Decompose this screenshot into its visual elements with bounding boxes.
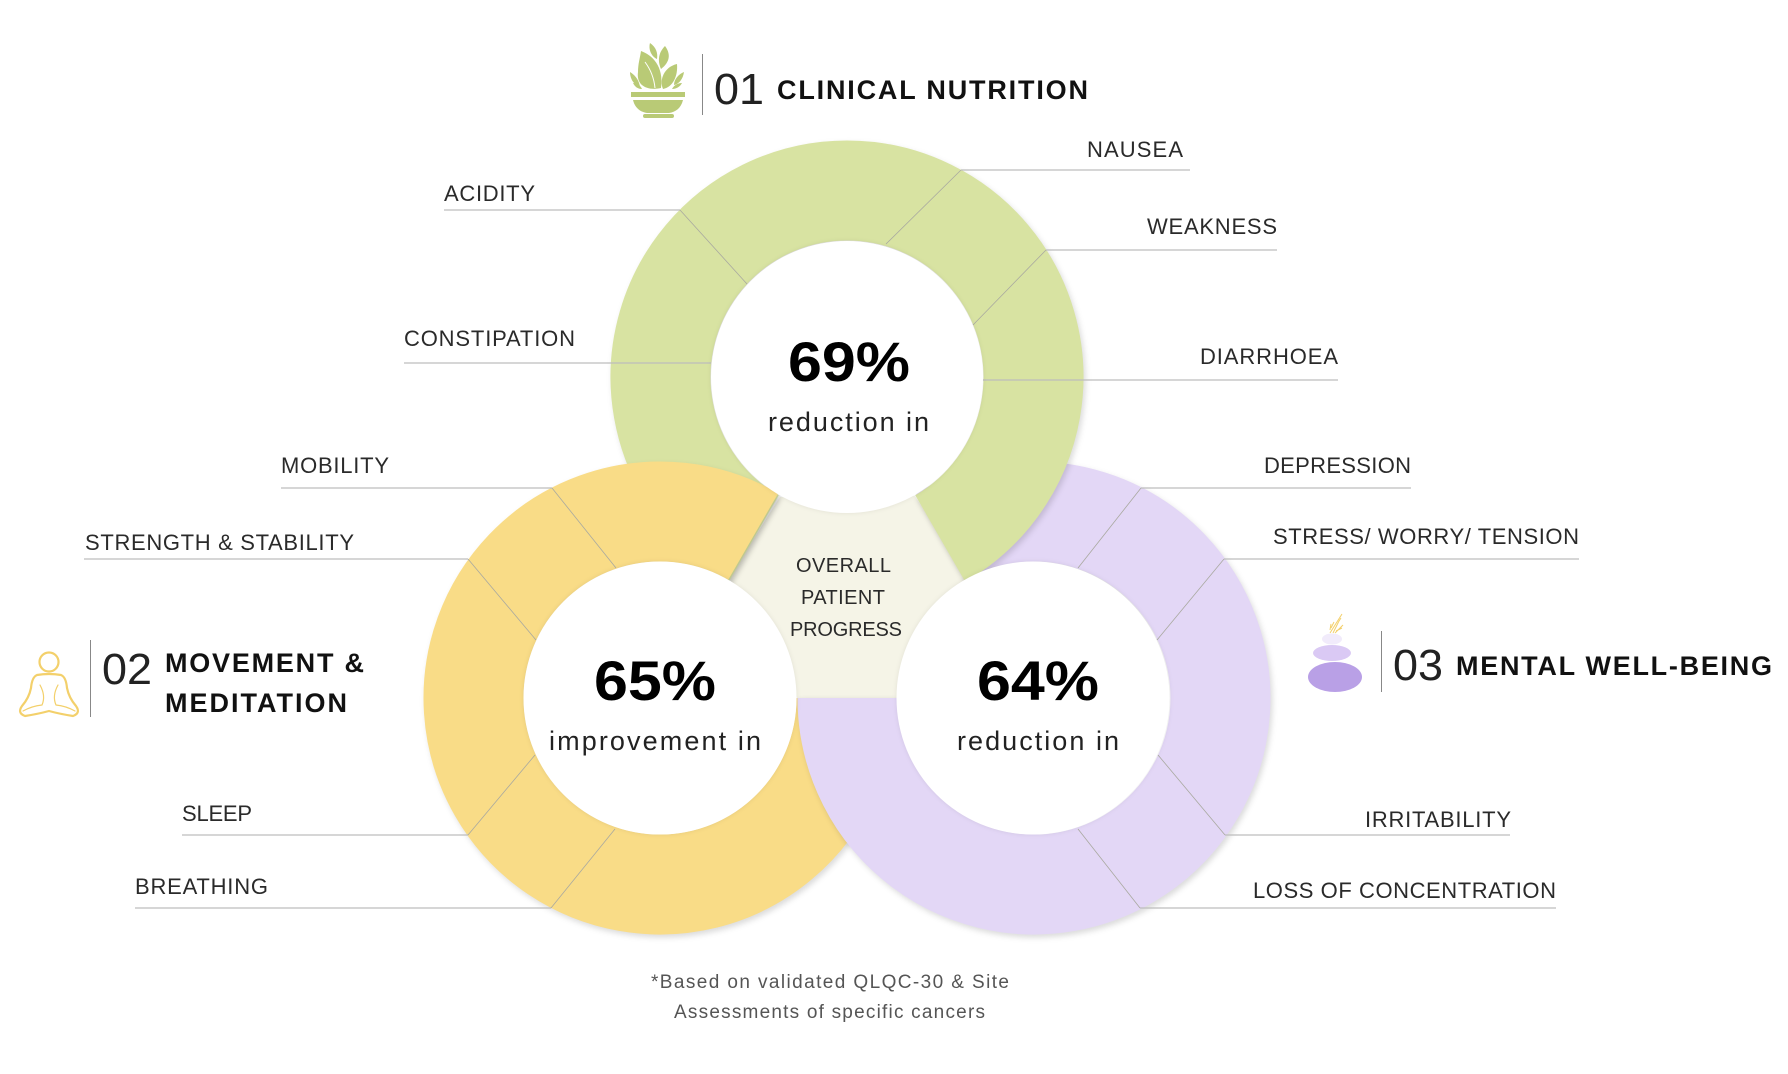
labels: mental well-being symptoms: STRESS/ WORRY/ TENSION: [1273, 524, 1579, 549]
footnote: *Based on validated QLQC-30 & Site: [651, 972, 1009, 993]
divider: [702, 54, 703, 115]
stat: 69% reduction: reduction in: [768, 407, 929, 437]
centre circle: clinical nutrition: [711, 241, 983, 513]
ring: clinical nutrition: [660, 190, 1034, 539]
number: 01: [714, 65, 764, 114]
labels: clinical nutrition symptoms: [404, 137, 1338, 369]
stat: 65% improvement: 65%: [594, 649, 716, 712]
stat: 64% reduction: reduction in: [957, 726, 1119, 756]
labels: mental well-being symptoms: IRRITABILITY: [1365, 807, 1511, 832]
footnote: [651, 972, 1009, 1023]
centre label: overall patient progress: OVERALL: [796, 555, 891, 577]
labels: movement symptoms: MOBILITY: [281, 453, 389, 478]
labels: movement symptoms: SLEEP: [182, 801, 252, 826]
stat: 65% improvement: [549, 649, 761, 756]
stat: 65% improvement: improvement in: [549, 726, 761, 756]
stat: 64% reduction: 64%: [977, 649, 1099, 712]
leader lines: movement and meditation: [84, 488, 616, 908]
header: 01 clinical nutrition: [630, 43, 1088, 118]
leader lines: clinical nutrition: [404, 170, 1338, 380]
footnote: Assessments of specific cancers: [674, 1002, 985, 1023]
centre label: overall patient progress: PATIENT: [801, 587, 885, 609]
header: 02 movement and meditation: [20, 640, 364, 718]
centre circle: mental well-being: [896, 562, 1170, 834]
header: 03 mental well-being: [1308, 614, 1772, 692]
heading: CLINICAL NUTRITION: [777, 75, 1088, 105]
labels: mental well-being symptoms: [1253, 453, 1579, 903]
heading: MENTAL WELL-BEING: [1456, 651, 1772, 681]
labels: clinical nutrition symptoms: WEAKNESS: [1147, 214, 1277, 239]
icon: meditating figure: [20, 652, 78, 716]
stat: 64% reduction: [957, 649, 1119, 756]
labels: movement symptoms: BREATHING: [135, 874, 268, 899]
divider: [90, 640, 91, 717]
centre label: overall patient progress: [790, 555, 902, 641]
labels: mental well-being symptoms: DEPRESSION: [1264, 453, 1411, 478]
icon: bowl with leaves: [630, 43, 685, 118]
labels: clinical nutrition symptoms: ACIDITY: [444, 181, 535, 206]
icon: stacked stones with flame: [1308, 614, 1362, 692]
labels: movement symptoms: STRENGTH & STABILITY: [85, 530, 354, 555]
heading: MOVEMENT &: [165, 648, 364, 678]
stat: 69% reduction: [768, 330, 929, 437]
number: 03: [1393, 641, 1443, 690]
stat: 69% reduction: 69%: [788, 330, 910, 393]
ring: movement and meditation: [474, 512, 846, 885]
centre circle: movement and meditation: [524, 562, 796, 834]
leader lines: mental well-being: [1078, 488, 1579, 908]
labels: mental well-being symptoms: LOSS OF CONCENTRATION: [1253, 878, 1556, 903]
labels: movement symptoms: [85, 453, 389, 899]
diagram: three overlapping rings: [474, 190, 1220, 885]
labels: clinical nutrition symptoms: DIARRHOEA: [1200, 344, 1338, 369]
heading: [165, 648, 364, 718]
ring overlap: mental well-being over movement: [798, 698, 1034, 940]
ring: mental well-being: [848, 512, 1220, 885]
number: 02: [102, 645, 152, 694]
divider: [1381, 631, 1382, 692]
labels: clinical nutrition symptoms: NAUSEA: [1087, 137, 1183, 162]
centre label: overall patient progress: PROGRESS: [790, 619, 902, 641]
labels: clinical nutrition symptoms: CONSTIPATION: [404, 326, 575, 351]
heading: MEDITATION: [165, 688, 347, 718]
overall progress centre area: [729, 496, 967, 698]
